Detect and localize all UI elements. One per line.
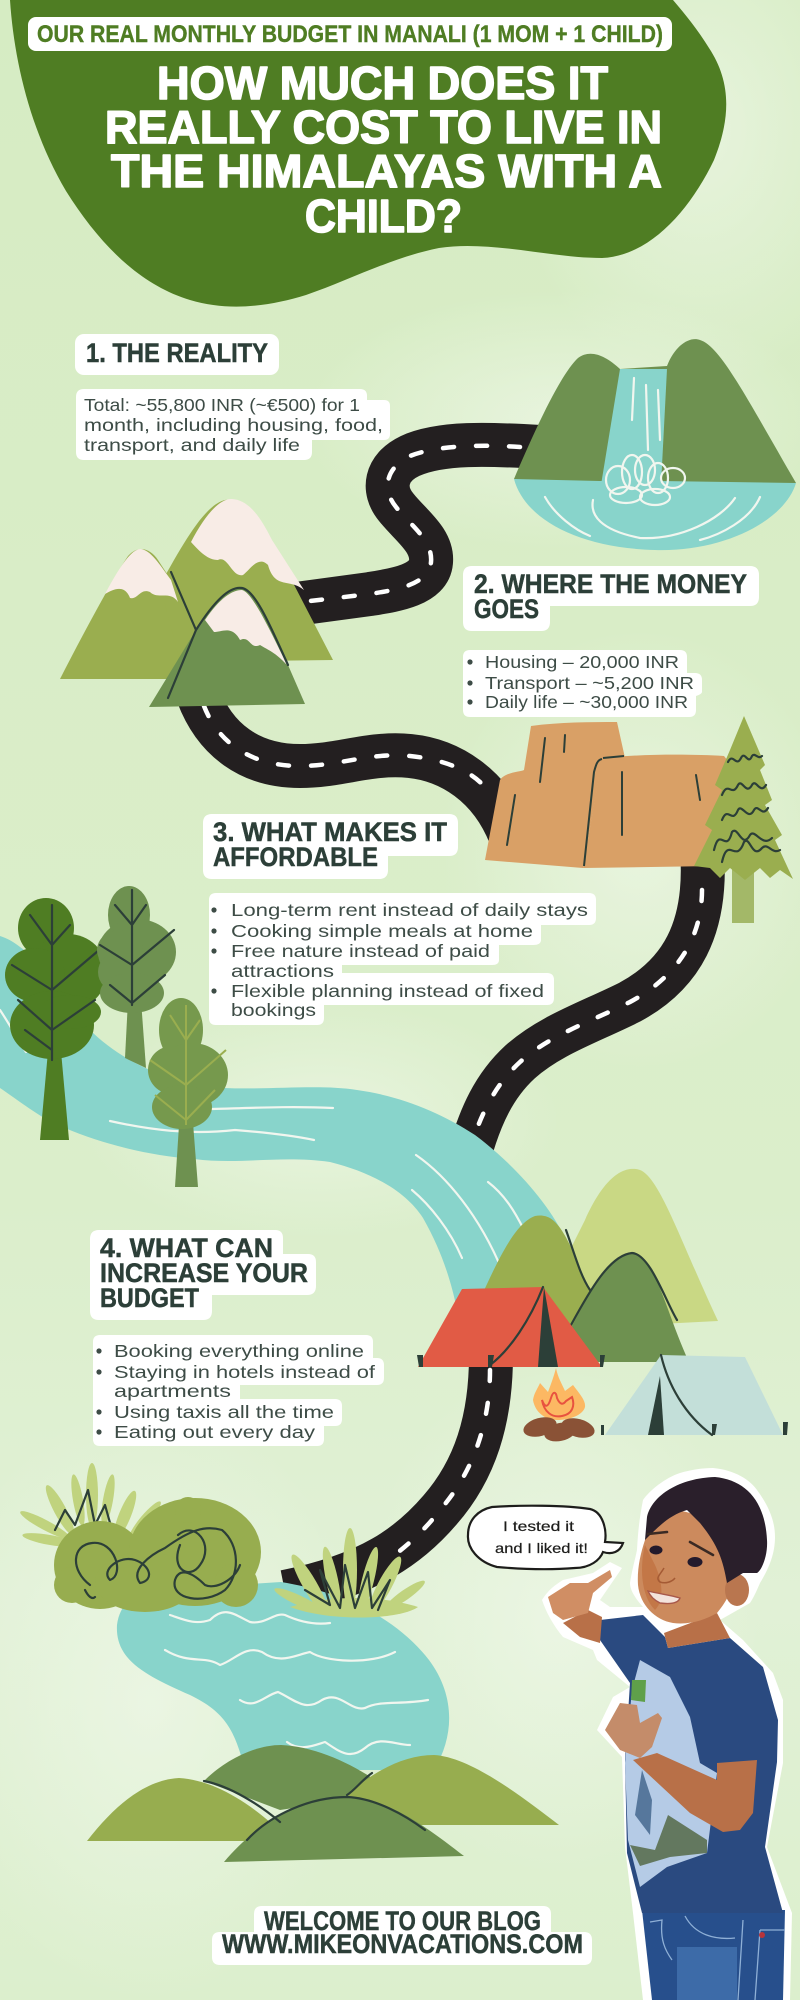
section 3 list: Free nature instead of paid	[231, 941, 490, 961]
road: third section	[468, 850, 703, 1160]
green print patch	[631, 1680, 646, 1702]
right grass	[272, 1528, 428, 1619]
section 4 heading: INCREASE YOUR	[100, 1258, 308, 1288]
river	[0, 936, 566, 1340]
section 2 heading: GOES	[474, 594, 539, 624]
jeans	[642, 1910, 785, 2000]
section 3 list: Flexible planning instead of fixed	[231, 981, 544, 1001]
section 2 list: Daily life – ~30,000 INR	[485, 692, 688, 712]
section 3 list: bookings	[231, 1000, 316, 1020]
section 1 text: transport, and daily life	[84, 435, 300, 455]
section 4 list: Booking everything online	[114, 1341, 364, 1361]
speech bubble: I tested it	[503, 1518, 574, 1534]
title: HOW MUCH DOES IT	[157, 57, 608, 109]
mouth	[648, 1591, 680, 1603]
section 3 heading: AFFORDABLE	[213, 842, 378, 872]
section 3 list: Long-term rent instead of daily stays	[231, 900, 588, 920]
small tree	[148, 998, 228, 1187]
section 4 heading: BUDGET	[100, 1283, 199, 1313]
waterfall and hills	[514, 339, 796, 550]
section 4 list: Using taxis all the time	[114, 1402, 334, 1422]
lake	[117, 1582, 449, 1770]
large dark tree	[5, 898, 107, 1140]
title blob	[10, 0, 726, 307]
speech bubble	[468, 1506, 623, 1569]
ear	[725, 1574, 749, 1606]
snow capped mountains	[60, 499, 333, 707]
section 3 list: Cooking simple meals at home	[231, 921, 533, 941]
bush	[54, 1497, 261, 1612]
road: first section	[296, 445, 540, 604]
nose	[658, 1568, 675, 1583]
section 2 heading	[463, 566, 759, 631]
rolling hills	[87, 1745, 559, 1862]
campfire	[521, 1368, 597, 1444]
section 3 list	[209, 893, 596, 1025]
blue tent	[601, 1355, 788, 1435]
road: second section	[198, 695, 510, 835]
section 4 list	[93, 1335, 384, 1446]
fist	[605, 1703, 662, 1758]
neck	[664, 1613, 730, 1648]
red tent	[417, 1287, 605, 1367]
campsite mountains	[470, 1169, 718, 1362]
section 4 heading: 4. WHAT CAN	[100, 1233, 273, 1263]
rock formation	[485, 722, 760, 868]
title	[105, 57, 662, 242]
section 4 heading	[90, 1230, 316, 1320]
forearm to thumb	[563, 1610, 602, 1643]
section 4 list: apartments	[114, 1381, 231, 1401]
thumbs up hand	[548, 1570, 612, 1620]
section 1 text: Total: ~55,800 INR (~€500) for 1	[84, 395, 360, 415]
footer blog link: WWW.MIKEONVACATIONS.COM	[222, 1929, 583, 1959]
boy photo cutout	[542, 1468, 792, 2000]
shirt print	[625, 1660, 717, 1887]
section 1 text: month, including housing, food,	[84, 415, 383, 435]
eyes	[650, 1546, 702, 1567]
section 3 heading	[203, 814, 458, 879]
section 2 list: Transport – ~5,200 INR	[485, 673, 694, 693]
pointing arm	[633, 1753, 757, 1832]
section 4 list: Staying in hotels instead of	[114, 1362, 375, 1382]
middle tree	[97, 886, 176, 1068]
section 2 list	[463, 650, 702, 717]
section 1 text	[76, 389, 390, 460]
title: CHILD?	[305, 190, 462, 242]
section 3 list: attractions	[231, 961, 334, 981]
footer blog link	[212, 1906, 592, 1965]
section 4 list: Eating out every day	[114, 1422, 315, 1442]
eyebrows	[648, 1532, 713, 1555]
title: THE HIMALAYAS WITH A	[111, 145, 662, 197]
section 2 heading: 2. WHERE THE MONEY	[474, 569, 747, 599]
section 3 heading: 3. WHAT MAKES IT	[213, 817, 447, 847]
speech bubble: and I liked it!	[495, 1540, 588, 1556]
hair	[645, 1477, 767, 1583]
face	[638, 1510, 735, 1623]
shirt	[600, 1615, 783, 1913]
left grass	[18, 1463, 164, 1550]
road: fourth section	[285, 1355, 491, 1592]
pine tree	[694, 716, 793, 923]
subtitle pill: OUR REAL MONTHLY BUDGET IN MANALI (1 MOM + 1 CHILD)	[37, 21, 663, 48]
title: REALLY COST TO LIVE IN	[105, 101, 662, 153]
section 2 list: Housing – 20,000 INR	[485, 652, 679, 672]
section 1 heading: 1. THE REALITY	[86, 338, 268, 368]
footer blog link: WELCOME TO OUR BLOG	[264, 1906, 541, 1936]
section 1 heading	[75, 334, 279, 375]
